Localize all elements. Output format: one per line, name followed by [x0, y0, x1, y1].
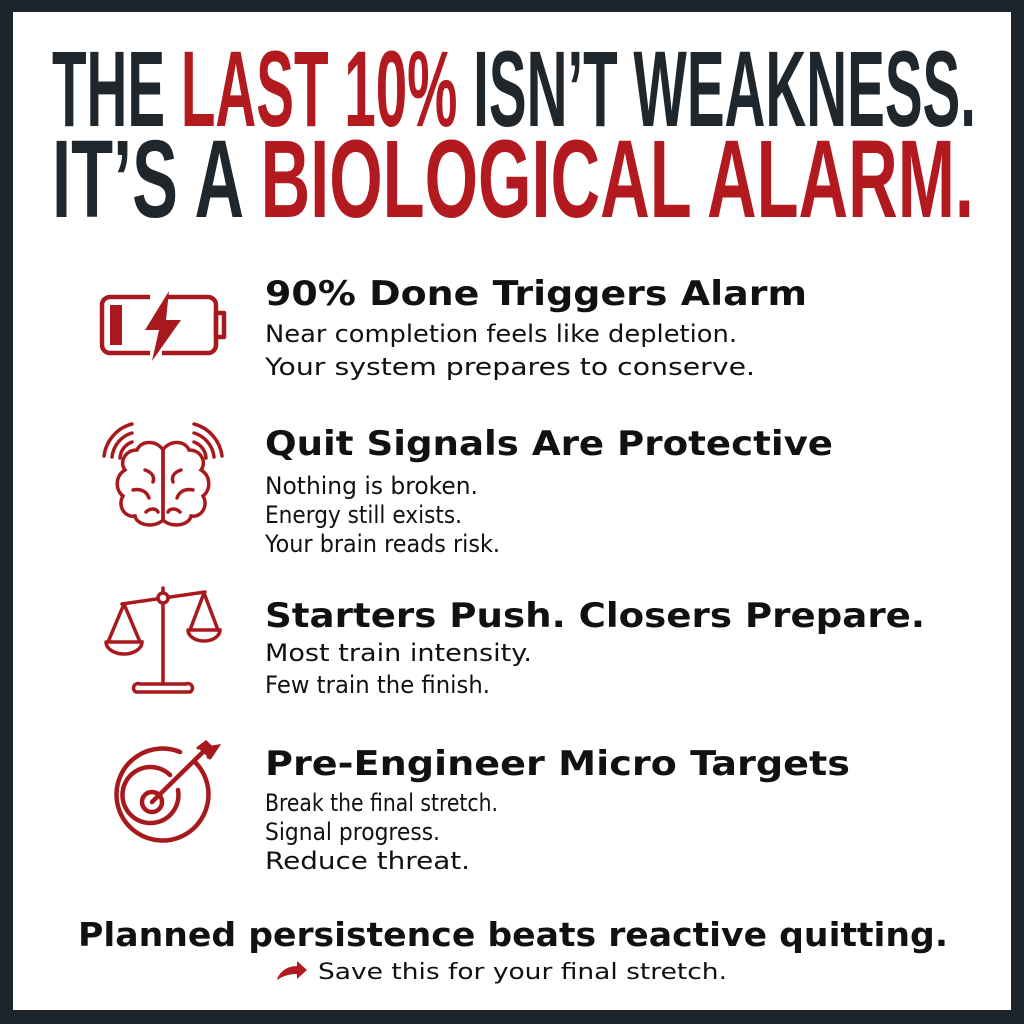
item 3 text: Starters Push. Closers Prepare. — [265, 596, 925, 636]
item 2 text: Energy still exists. — [265, 501, 462, 529]
item 1 text: Near completion feels like depletion. — [265, 320, 737, 348]
icon: arrow — [277, 961, 307, 980]
item 1 text: Your system prepares to conserve. — [264, 353, 755, 381]
item 4 text: Break the final stretch. — [265, 789, 498, 817]
item 4 text: Pre-Engineer Micro Targets — [265, 744, 850, 784]
item 4 text — [265, 744, 850, 875]
icon: target — [116, 742, 218, 841]
item 4 text: Signal progress. — [265, 818, 440, 846]
item 2 text: Nothing is broken. — [265, 472, 478, 500]
title — [52, 28, 976, 241]
footer cta: Save this for your final stretch. — [318, 960, 727, 985]
icon: battery — [102, 291, 224, 361]
item 3 text: Most train intensity. — [265, 639, 532, 667]
item 2 text: Quit Signals Are Protective — [265, 424, 833, 464]
item 1 text: 90% Done Triggers Alarm — [265, 274, 807, 314]
item 2 text — [264, 424, 833, 558]
footer tagline: Planned persistence beats reactive quitting. — [78, 915, 948, 954]
item 3 text — [265, 596, 925, 699]
item 2 text: Your brain reads risk. — [264, 530, 500, 558]
item 1 text — [264, 274, 807, 381]
icon: brain — [104, 424, 222, 525]
icon: scales — [106, 588, 220, 692]
item 4 text: Reduce threat. — [265, 847, 470, 875]
item 3 text: Few train the finish. — [265, 671, 490, 699]
